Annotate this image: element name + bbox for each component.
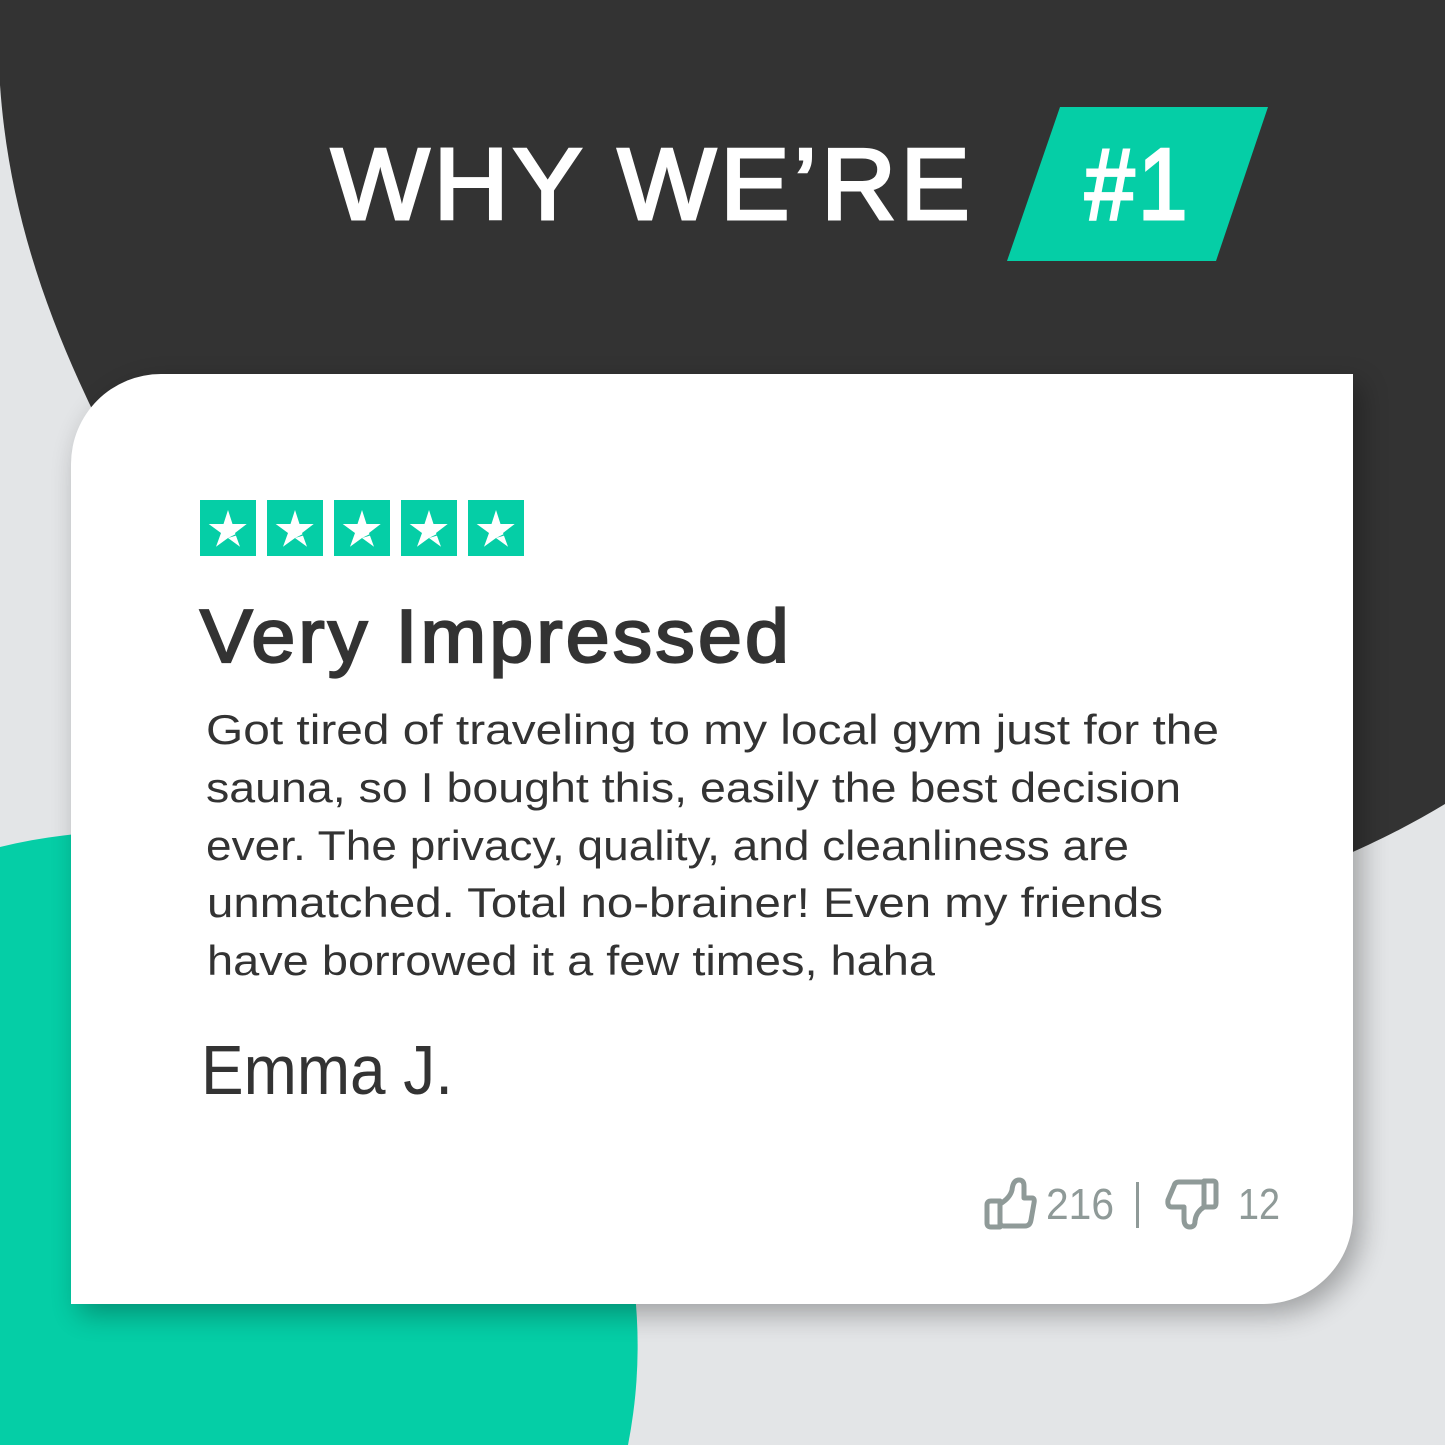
star 5 <box>468 500 524 556</box>
review body: Got tired of traveling to my local gym just for the <box>206 706 1219 753</box>
count: dislikes: 12 <box>1238 1180 1280 1229</box>
title: WHY WE’RE <box>331 129 974 241</box>
icon: thumbs up <box>987 1180 1034 1227</box>
reviewer name: Emma J. <box>201 1031 453 1109</box>
review card <box>71 374 1353 1304</box>
star 1 <box>200 500 256 556</box>
card shadow <box>79 384 1361 1314</box>
separator <box>1136 1182 1139 1228</box>
star 2 <box>267 500 323 556</box>
review body: unmatched. Total no-brainer! Even my friends <box>207 879 1163 926</box>
star 3 <box>334 500 390 556</box>
badge: #1 <box>1007 107 1268 261</box>
review body: ever. The privacy, quality, and cleanliness are <box>206 822 1129 869</box>
icon: thumbs down <box>1168 1181 1216 1227</box>
votes <box>987 1180 1280 1229</box>
review body: have borrowed it a few times, haha <box>207 937 936 984</box>
star 4 <box>401 500 457 556</box>
star rating <box>200 500 524 556</box>
review body: sauna, so I bought this, easily the best decision <box>206 764 1181 811</box>
review body <box>206 706 1219 984</box>
green circle <box>0 832 638 1445</box>
badge: #1: #1 <box>1085 129 1191 241</box>
dark background shape <box>0 0 1445 922</box>
count: likes: 216 <box>1046 1180 1114 1229</box>
review heading: Very Impressed <box>200 594 792 678</box>
